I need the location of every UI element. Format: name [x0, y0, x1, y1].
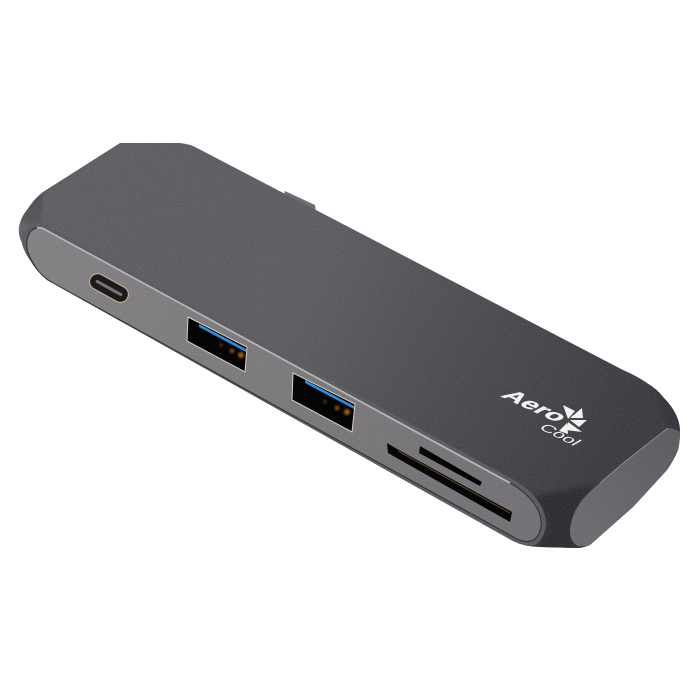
panel outline [27, 228, 541, 542]
left chamfer [18, 183, 57, 232]
hub body [18, 143, 680, 548]
port: microSD slot [419, 446, 482, 486]
lower right chamfer [535, 485, 593, 548]
front panel rim [27, 227, 541, 542]
port: USB-A 1 [187, 317, 247, 372]
panel highlight [37, 228, 510, 483]
top face [18, 143, 680, 548]
surface grain [19, 143, 680, 548]
port: USB-C [87, 271, 131, 305]
logo: AeroCool [495, 387, 587, 448]
right chamfer [656, 389, 680, 432]
front panel [27, 227, 541, 542]
logo wordmark: Aero: Aero [495, 387, 573, 425]
logo wordmark: Cool: Cool [535, 421, 586, 448]
logo icon: fan star [559, 405, 587, 434]
product illustration: USB-C hub [18, 143, 680, 548]
rear connector [283, 191, 316, 212]
port: SD card slot [387, 443, 512, 522]
end cap edge highlight [600, 428, 668, 483]
port: USB-A 2 [292, 373, 355, 432]
end cap [570, 428, 680, 546]
